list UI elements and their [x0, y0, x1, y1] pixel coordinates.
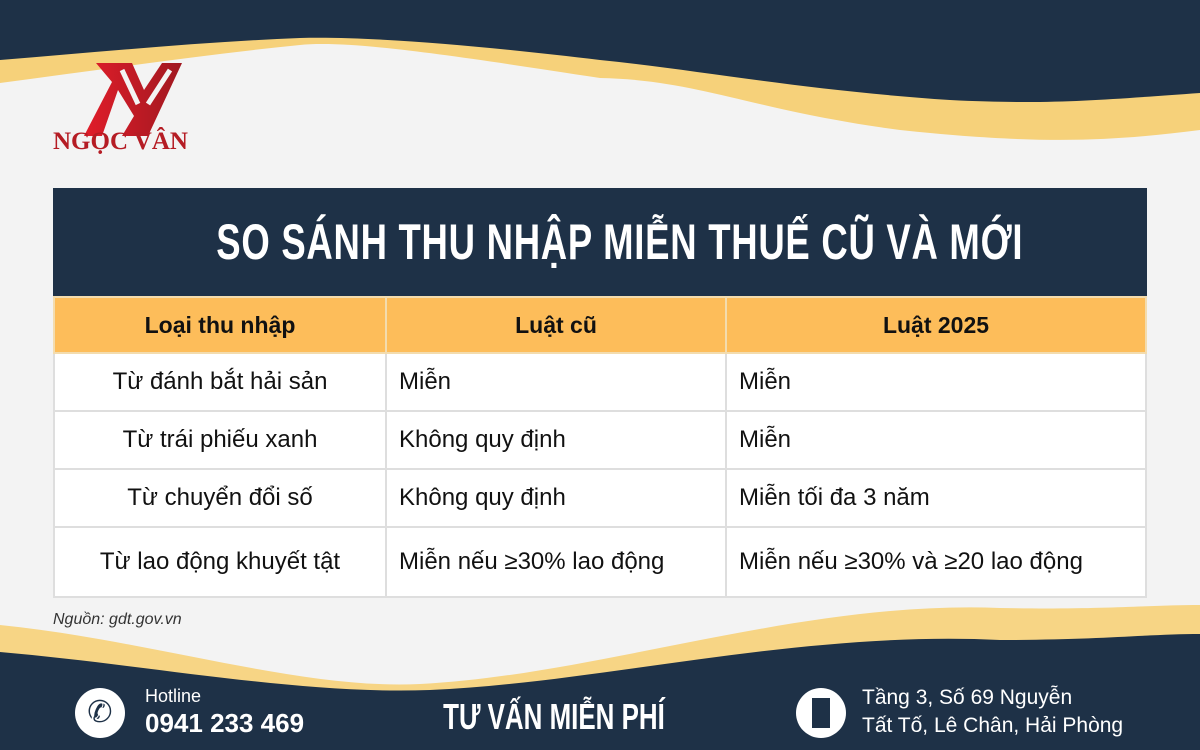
- footer: address: Tầng 3, Số 69 Nguyễn: [862, 686, 1072, 709]
- table body: Miễn: [399, 368, 451, 395]
- table body: Từ lao động khuyết tật: [100, 548, 340, 575]
- title: SO SÁNH THU NHẬP MIỄN THUẾ CŨ VÀ MỚI: [216, 214, 1024, 270]
- table body: [53, 296, 1147, 598]
- footer: address: Tất Tố, Lê Chân, Hải Phòng: [862, 714, 1123, 737]
- table body: Loại thu nhập: [145, 312, 295, 338]
- logo: [53, 63, 188, 155]
- icon: building: [796, 688, 846, 738]
- panel: comparison table: [53, 188, 1147, 598]
- brand name: NGỌC VÂN: [53, 128, 188, 155]
- footer: hotline: [75, 686, 304, 738]
- icon: NV logo mark: [84, 63, 182, 136]
- table body: Từ đánh bắt hải sản: [113, 368, 327, 395]
- footer: hotline: 0941 233 469: [145, 708, 304, 738]
- table body: Miễn tối đa 3 năm: [739, 484, 930, 511]
- footer: slogan: TƯ VẤN MIỄN PHÍ: [443, 696, 665, 737]
- table body: Luật cũ: [515, 312, 597, 338]
- table body: Miễn: [739, 368, 791, 395]
- table body: Không quy định: [399, 426, 566, 453]
- table body: Miễn: [739, 426, 791, 453]
- icon: phone: ✆: [87, 696, 113, 729]
- title: [53, 188, 1147, 296]
- table body: Từ trái phiếu xanh: [123, 426, 317, 453]
- table body: Miễn nếu ≥30% và ≥20 lao động: [739, 548, 1083, 575]
- footer: hotline: Hotline: [145, 686, 201, 706]
- table body: Luật 2025: [883, 312, 989, 338]
- source note: Nguồn: gdt.gov.vn: [53, 611, 182, 628]
- table body: Không quy định: [399, 484, 566, 511]
- table body: Miễn nếu ≥30% lao động: [399, 548, 664, 575]
- footer: address: [796, 686, 1123, 738]
- icon: phone: [75, 688, 125, 738]
- table body: Từ chuyển đổi số: [127, 484, 313, 511]
